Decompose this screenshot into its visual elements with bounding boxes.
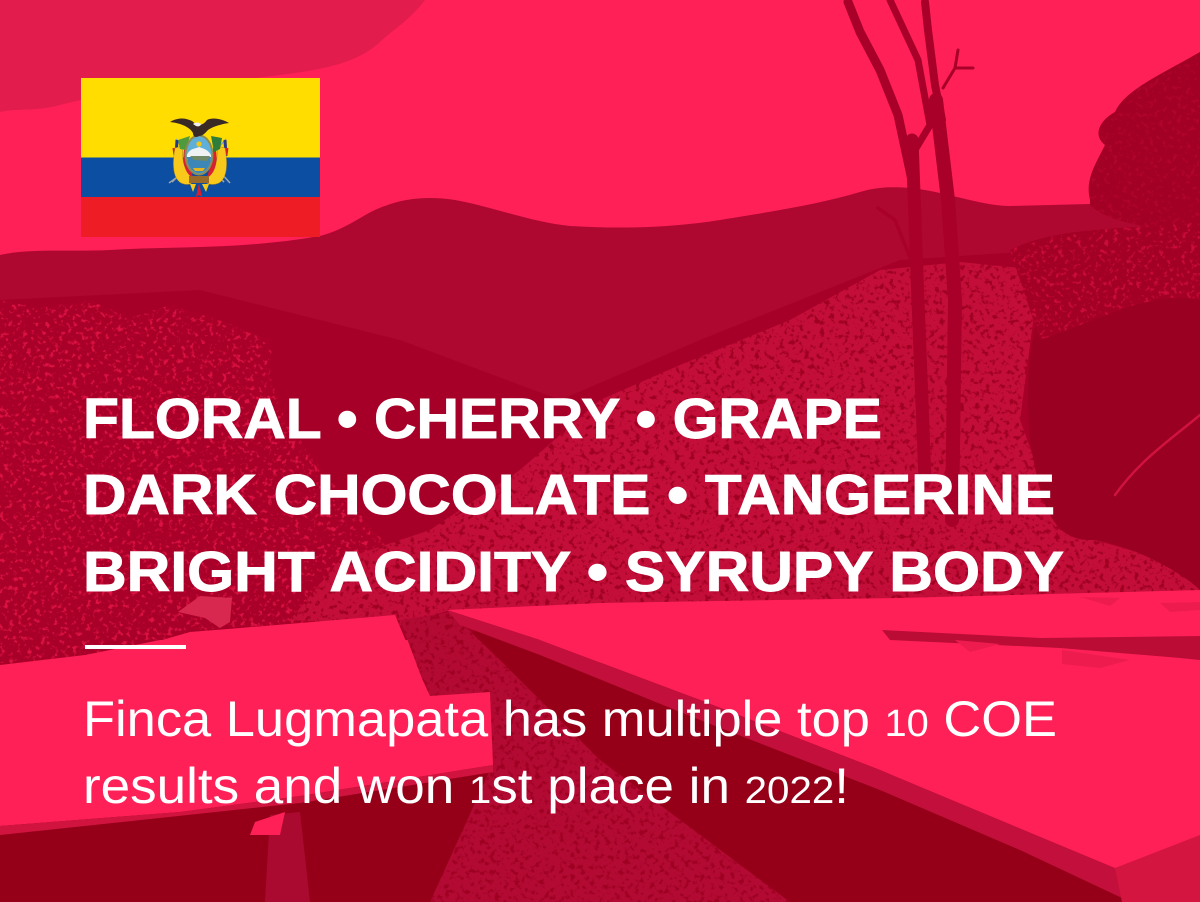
arms: yellow drapery xyxy=(173,146,194,184)
right tree canopy xyxy=(1085,50,1200,235)
foil sheet in gutter xyxy=(400,610,800,902)
right bed end xyxy=(1115,835,1200,902)
gutter timber xyxy=(265,812,310,902)
arms: condor xyxy=(170,118,229,137)
worker on bed xyxy=(178,596,232,628)
right bed front edge xyxy=(447,610,1122,898)
dark woodland at right xyxy=(1028,240,1200,590)
description text xyxy=(83,691,1057,814)
heading line 1: FLORAL • CHERRY • GRAPE xyxy=(83,387,882,451)
flavour notes heading xyxy=(83,387,1064,604)
heading line 3: BRIGHT ACIDITY • SYRUPY BODY xyxy=(83,540,1064,604)
arms: ribbon xyxy=(190,184,209,192)
right drying bed xyxy=(447,590,1200,896)
flag of Ecuador xyxy=(81,78,320,237)
heading line 2: DARK CHOCOLATE • TANGERINE xyxy=(83,463,1055,527)
icon: coat of arms xyxy=(169,118,230,197)
mountain ridge xyxy=(0,187,1200,640)
left bed edge xyxy=(0,765,493,835)
bottom ground xyxy=(0,760,800,902)
left drying bed xyxy=(0,615,493,826)
left tree mass xyxy=(0,300,385,665)
arms: laurel xyxy=(178,136,190,150)
right shrub xyxy=(1010,223,1200,340)
lower mountain shade xyxy=(0,240,1200,640)
divider rule xyxy=(85,645,186,649)
flag stripes xyxy=(81,78,320,237)
arms: fasces xyxy=(189,176,209,183)
description line 2: results and won 1st place in 2022! xyxy=(83,758,849,814)
inner bed gap xyxy=(882,630,1200,660)
arms: spears xyxy=(169,139,230,183)
middle hillside xyxy=(280,250,1200,630)
bare tree trunks xyxy=(848,0,1200,520)
arms: red and blue drapery xyxy=(183,148,193,178)
inner bed bumps xyxy=(955,597,1200,668)
dark cloud top left xyxy=(0,0,425,112)
description line 1: Finca Lugmapata has multiple top 10 COE xyxy=(83,691,1057,747)
arms: shield xyxy=(184,134,214,176)
arms: flags xyxy=(176,140,226,156)
